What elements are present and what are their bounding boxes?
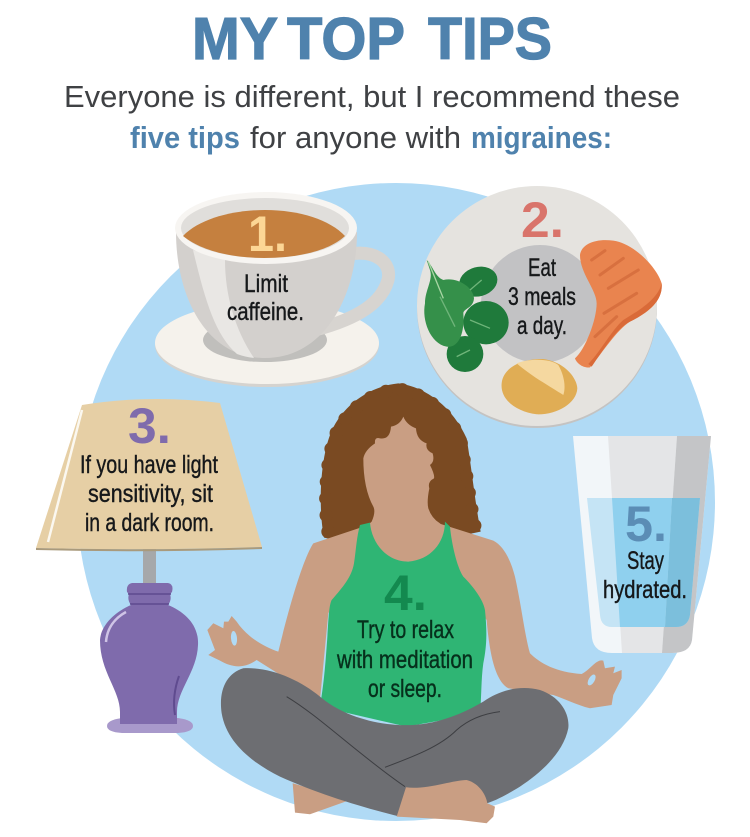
text: relax [336, 616, 473, 703]
illustration: woman [207, 383, 622, 823]
tank top [320, 522, 486, 727]
icon: lamp stem [143, 548, 156, 583]
text: limit caffeine: caffeine. [227, 298, 304, 326]
face and neck [353, 417, 453, 562]
text: light sensitivity [80, 451, 218, 537]
pants [221, 668, 568, 817]
text: eat 3 meals a day [508, 254, 576, 340]
icon: cup [175, 192, 389, 358]
title: TIPS [428, 6, 552, 72]
number 3: 3. [128, 398, 171, 454]
text: stay hydrated: hydrated. [603, 576, 687, 604]
icon: bread roll [502, 359, 577, 414]
text: eat 3 meals a day: 3 meals [508, 283, 576, 311]
text: light sensitivity: in a dark room. [85, 509, 214, 537]
text: limit caffeine [227, 270, 304, 326]
icon: spinach [424, 260, 509, 372]
text: stay hydrated [603, 547, 687, 604]
text: relax: or sleep. [368, 675, 442, 703]
subtitle: migraines: [471, 120, 612, 155]
hand finger gaps [230, 631, 597, 687]
icon: lamp shade [36, 399, 262, 551]
subtitle [64, 79, 680, 155]
subtitle: for anyone with [250, 120, 461, 155]
tip 2: plate [417, 186, 662, 428]
subtitle: five tips [130, 120, 240, 155]
tip 3: lamp [36, 398, 262, 733]
subtitle: Everyone is different, but I recommend these [64, 79, 680, 114]
tip 5: glass of water [573, 436, 711, 653]
number 5: 5. [625, 496, 667, 552]
number 4: 4. [384, 565, 427, 621]
background circle [77, 183, 715, 821]
tip 4: meditating woman [207, 383, 622, 823]
text: limit caffeine: Limit [244, 270, 288, 298]
title: MY [192, 6, 278, 72]
text: light sensitivity: sensitivity, sit [88, 480, 213, 508]
number 2: 2. [521, 192, 564, 248]
text: relax: Try to relax [357, 616, 454, 644]
icon: saucer [155, 302, 379, 387]
text: eat 3 meals a day: Eat [528, 254, 556, 282]
left arm [207, 523, 373, 700]
text: stay hydrated: Stay [627, 547, 664, 575]
number 1: 1. [248, 206, 287, 262]
right arm [433, 522, 622, 708]
tip 1: coffee cup [155, 192, 389, 387]
hair [321, 383, 481, 548]
icon: chicken leg [575, 240, 662, 367]
front foot [397, 780, 495, 823]
title: TOP [287, 6, 405, 72]
text: light sensitivity: If you have light [80, 451, 218, 479]
title [192, 6, 552, 72]
icon: lamp base [100, 583, 198, 733]
back foot [293, 783, 350, 814]
icon: plate [417, 186, 657, 428]
text: eat 3 meals a day: a day. [517, 312, 567, 340]
icon: glass [573, 436, 711, 653]
text: relax: with meditation [336, 646, 473, 674]
